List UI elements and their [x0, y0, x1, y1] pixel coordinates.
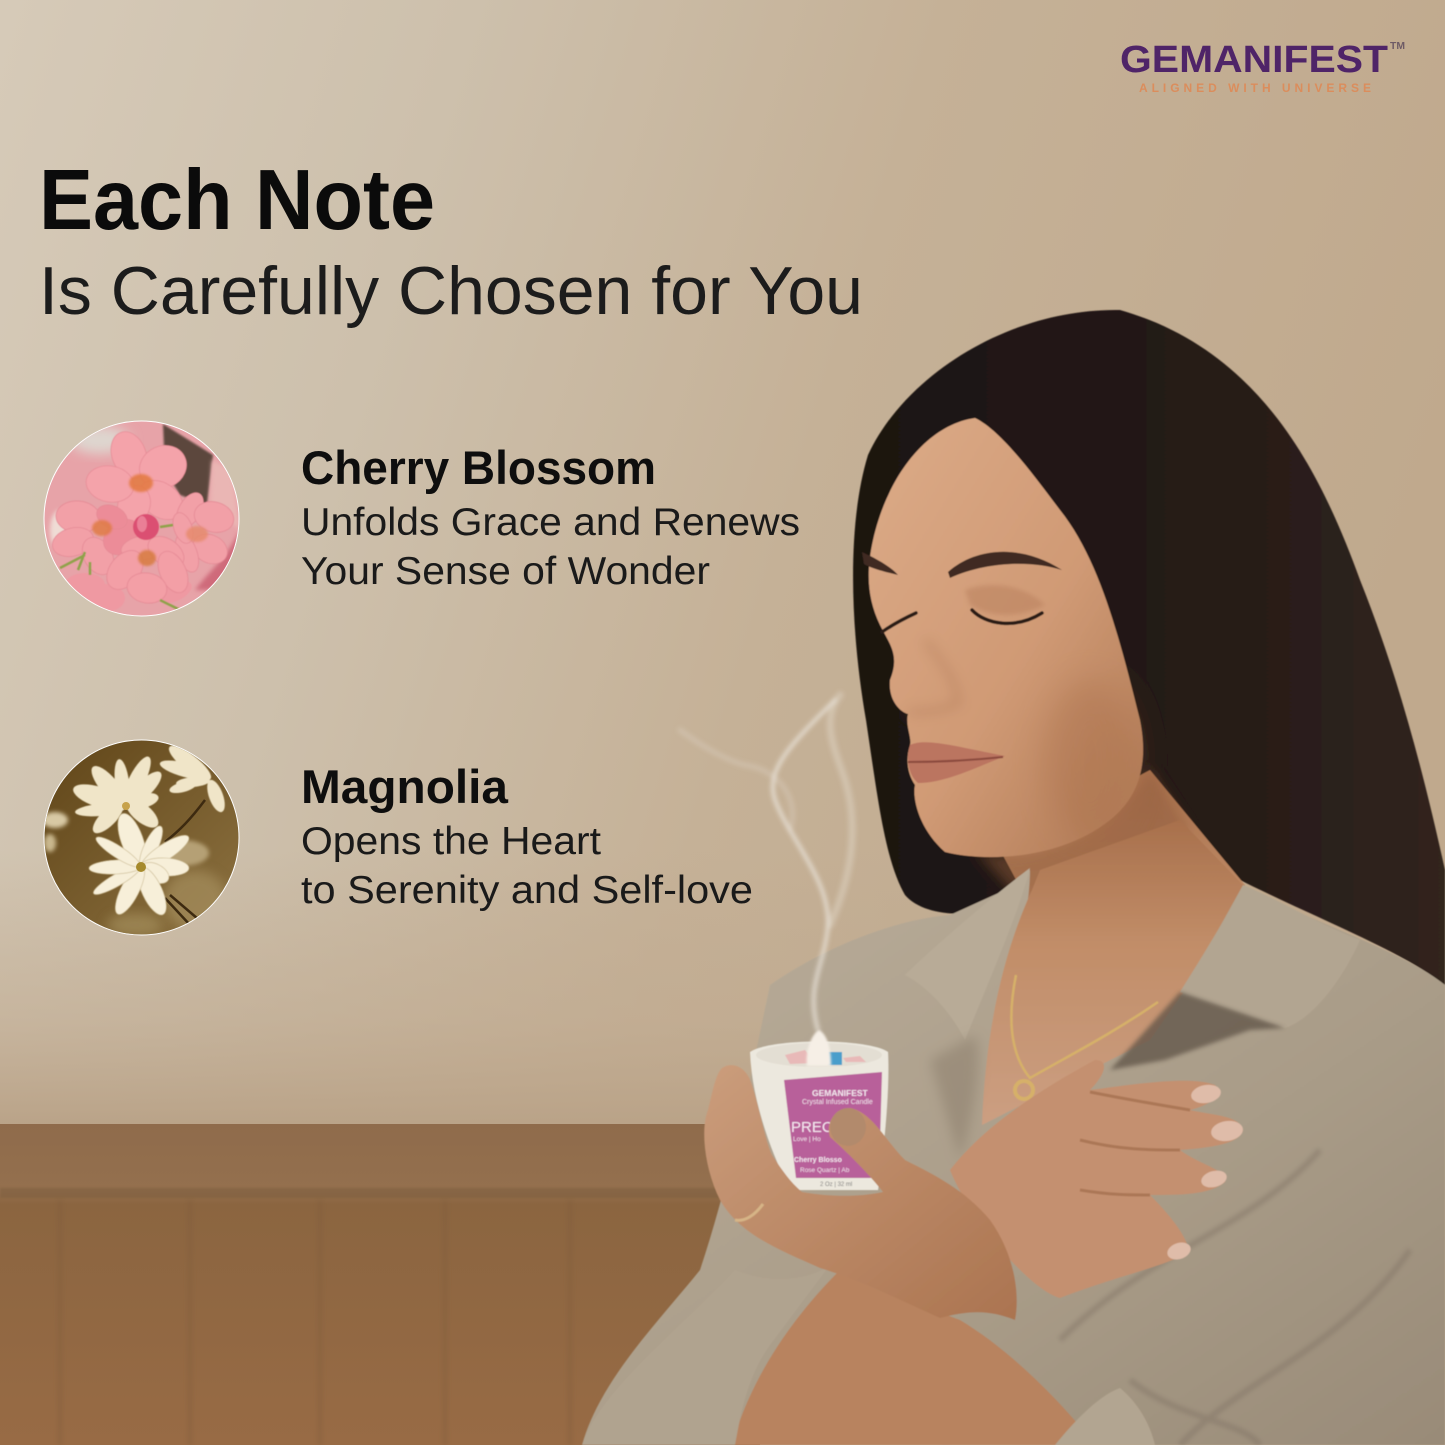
face — [869, 418, 1143, 857]
cheek shade — [1045, 680, 1135, 840]
chest opening — [982, 820, 1243, 1125]
magnolia text: Opens the Heart — [301, 820, 601, 863]
eyebrows — [862, 552, 1062, 578]
wooden wainscot panel — [0, 1124, 760, 1445]
logo — [1120, 39, 1405, 95]
magnolia text: to Serenity and Self-love — [301, 869, 753, 912]
logo: GEMANIFEST — [1120, 39, 1388, 81]
label: Love | Ho — [793, 1136, 821, 1143]
label: Crystal Infused Candle — [802, 1099, 873, 1106]
hand on chest — [950, 1060, 1243, 1298]
left sleeve — [732, 1422, 740, 1445]
collar left — [964, 868, 1030, 1032]
shirt — [582, 870, 1445, 1445]
label: Rose Quartz | Ab — [800, 1167, 850, 1174]
closed eyes — [882, 610, 1042, 632]
woman — [582, 310, 1445, 1445]
label — [784, 1072, 882, 1178]
cherry blossom text — [301, 441, 800, 593]
cherry blossom text: Your Sense of Wonder — [301, 550, 710, 593]
logo: TM — [1390, 41, 1405, 52]
flower left — [52, 500, 136, 575]
forearm — [732, 1270, 1095, 1445]
icon: cherry blossom — [40, 420, 245, 620]
flower bottom — [106, 536, 188, 604]
sleeve cuff — [1055, 1388, 1155, 1445]
neck and chest — [1003, 769, 1245, 898]
eyelid shadow — [965, 585, 1045, 615]
magnolia flower C — [168, 746, 212, 780]
hand holding candle — [704, 1065, 1017, 1320]
flower top — [86, 431, 188, 520]
flame — [807, 1030, 831, 1066]
shirt folds — [1060, 1150, 1410, 1445]
necklace — [1011, 975, 1158, 1099]
title: Each Note — [39, 153, 435, 248]
cherry blossom text: Cherry Blossom — [301, 441, 656, 494]
logo: ALIGNED WITH UNIVERSE — [1139, 81, 1371, 95]
cherry blossom text: Unfolds Grace and Renews — [301, 501, 800, 544]
label: GEMANIFEST — [812, 1088, 869, 1098]
ring — [735, 1204, 763, 1220]
neck shadow — [975, 770, 1190, 900]
label: PREC — [791, 1119, 833, 1136]
lower left flower — [65, 573, 195, 612]
candle: 2 Oz | 32 ml — [820, 1182, 852, 1188]
nose shadow — [897, 708, 906, 726]
magnolia flower A — [90, 765, 118, 796]
magnolia text — [301, 760, 753, 912]
thumb nail — [830, 1108, 866, 1146]
lips — [908, 742, 1005, 783]
magnolia text: Magnolia — [301, 760, 509, 813]
collar right — [1180, 884, 1290, 993]
candle — [750, 1030, 888, 1190]
hair — [853, 310, 1445, 985]
glass — [750, 1042, 888, 1190]
fingernails — [1165, 1083, 1244, 1262]
title: Is Carefully Chosen for You — [39, 253, 863, 329]
label: Cherry Blosso — [794, 1157, 842, 1164]
magnolia flower B — [117, 812, 146, 862]
finger creases — [1080, 1092, 1190, 1195]
smoke — [680, 695, 852, 1030]
icon: magnolia — [40, 735, 245, 940]
flower right — [172, 492, 234, 572]
title — [39, 153, 863, 329]
